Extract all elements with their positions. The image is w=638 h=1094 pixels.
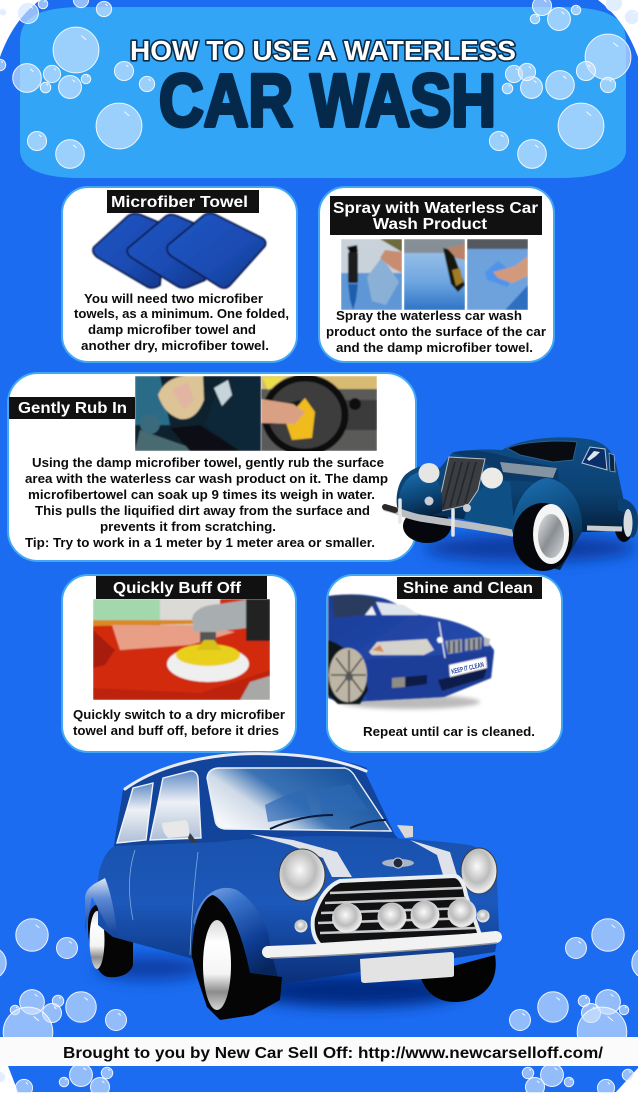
- heading: spray: Wash Product: [373, 216, 488, 233]
- rear whitewall: [624, 509, 632, 537]
- plate text: KEEP IT CLEAN: [451, 662, 485, 676]
- grille: [313, 876, 480, 945]
- bubbles: bottom left: [0, 918, 127, 1037]
- text: rub instructions: This pulls the liquified dirt away from the surface and: [35, 504, 370, 518]
- front bumper: [386, 508, 512, 533]
- rear wheel arch: [85, 878, 117, 937]
- front fender: [512, 478, 582, 570]
- car shadow: [425, 534, 635, 562]
- photo: cleaning steering wheel: [261, 376, 377, 452]
- text: towel instructions: You will need two microfiber: [84, 292, 263, 306]
- panel: microfiber towel: [62, 187, 297, 362]
- spot lamps: [294, 898, 490, 933]
- front wheel: [192, 895, 282, 1020]
- text: rub instructions: Tip: Try to work in a 1 meter by 1 meter area or smaller.: [25, 536, 375, 550]
- running board: [587, 528, 622, 529]
- footer credit bar: Brought to you by New Car Sell Off: http://www.newcarselloff.com/: [63, 1045, 604, 1062]
- title line 1: HOW TO USE A WATERLESS: [130, 35, 516, 66]
- title line 2: CAR WASH: [159, 59, 496, 142]
- bubbles: top right: [489, 0, 638, 168]
- heading: shine and clean: [397, 577, 542, 599]
- hood vent: [500, 462, 557, 478]
- text: rub instructions: [25, 456, 388, 550]
- photo: shiny blue sports car: [328, 594, 494, 709]
- footer credit bar: [0, 1037, 638, 1066]
- heading: microfiber towel: [107, 190, 259, 213]
- heading: spray: Spray with Waterless Car: [333, 200, 538, 217]
- text: rub instructions: microfibertowel can soak up 9 times its weigh in water.: [28, 488, 375, 502]
- illustration: blue mini car: [85, 752, 499, 1020]
- hood top: [452, 451, 560, 484]
- car body: [98, 836, 499, 985]
- text: buff instructions: towel and buff off, before it dries: [73, 724, 279, 738]
- heading: gently rub in: [9, 397, 135, 419]
- heading: quickly buff off: [96, 576, 267, 599]
- grille: [437, 457, 485, 512]
- side mirrors: [162, 820, 189, 838]
- text: buff instructions: [73, 708, 285, 738]
- front bumper: [268, 937, 496, 952]
- heading: quickly buff off: Quickly Buff Off: [113, 580, 242, 597]
- illustration: vintage blue car: [385, 437, 638, 571]
- panel: spray product: [319, 187, 554, 362]
- heading: shine and clean: Shine and Clean: [403, 580, 533, 597]
- text: towel instructions: damp microfiber towel and: [88, 323, 256, 337]
- wipers: [270, 815, 386, 829]
- rear wheel: [88, 904, 133, 977]
- badge: [382, 859, 414, 867]
- rear fender: [618, 498, 638, 538]
- heading: gently rub in: Gently Rub In: [18, 400, 127, 417]
- panel: gently rub in: [8, 373, 416, 561]
- panel: shine and clean: [327, 575, 562, 752]
- text: towel instructions: towels, as a minimum. One folded,: [74, 307, 289, 321]
- cowl fender: [464, 481, 515, 530]
- photo: bottle and towel: [341, 239, 402, 310]
- text: spray instructions: [326, 309, 546, 355]
- cabin: [114, 752, 405, 850]
- door window: [150, 771, 201, 840]
- rear window: [117, 783, 153, 843]
- roof trim: [125, 754, 366, 789]
- text: repeat instruction: Repeat until car is cleaned.: [363, 725, 535, 739]
- text: rub instructions: prevents it from scratching.: [100, 520, 276, 534]
- windshield: [207, 768, 391, 831]
- photo: wiping with towel: [467, 239, 528, 310]
- side window: [582, 447, 607, 470]
- text: spray instructions: and the damp microfiber towel.: [336, 341, 533, 355]
- front fender: [193, 888, 280, 985]
- title: [130, 35, 516, 142]
- left fender: [397, 472, 443, 518]
- left front wheel: [403, 509, 451, 543]
- windshield: [507, 441, 577, 462]
- headlights: [279, 849, 325, 901]
- text: buff instructions: Quickly switch to a dry microfiber: [73, 708, 285, 722]
- heading: microfiber towel: Microfiber Towel: [111, 194, 248, 211]
- text: rub instructions: area with the waterless car wash product on it. The damp: [25, 472, 388, 486]
- bubbles: bottom strip right: [522, 1066, 634, 1093]
- text: spray instructions: Spray the waterless car wash: [336, 309, 522, 323]
- text: towel instructions: another dry, microfiber towel.: [81, 339, 269, 353]
- panel: header banner: [20, 7, 626, 178]
- photo: hand rubbing car with towel: [135, 376, 261, 451]
- right front wheel: [420, 955, 496, 1002]
- heading: spray: [330, 196, 542, 235]
- image: three blue towels: [93, 213, 266, 288]
- car shadow: [95, 956, 465, 1007]
- rear wheel: [614, 504, 634, 542]
- front wheel: [513, 503, 573, 571]
- bubbles: bottom right: [509, 918, 638, 1037]
- text: towel instructions: [74, 292, 289, 353]
- hood stripes: [250, 834, 352, 877]
- bubbles: bottom strip left: [0, 1066, 114, 1093]
- headlights: [418, 463, 440, 483]
- bubbles: top left: [0, 0, 155, 168]
- door line: [129, 850, 198, 955]
- photo: spraying car surface: [404, 239, 465, 310]
- panel: quickly buff off: [62, 575, 296, 752]
- text: spray instructions: product onto the surface of the car: [326, 325, 546, 339]
- text: rub instructions: Using the damp microfiber towel, gently rub the surface: [32, 456, 384, 470]
- license plate: [360, 952, 454, 983]
- photo: polisher on red car: [93, 599, 270, 700]
- car body: [397, 437, 628, 534]
